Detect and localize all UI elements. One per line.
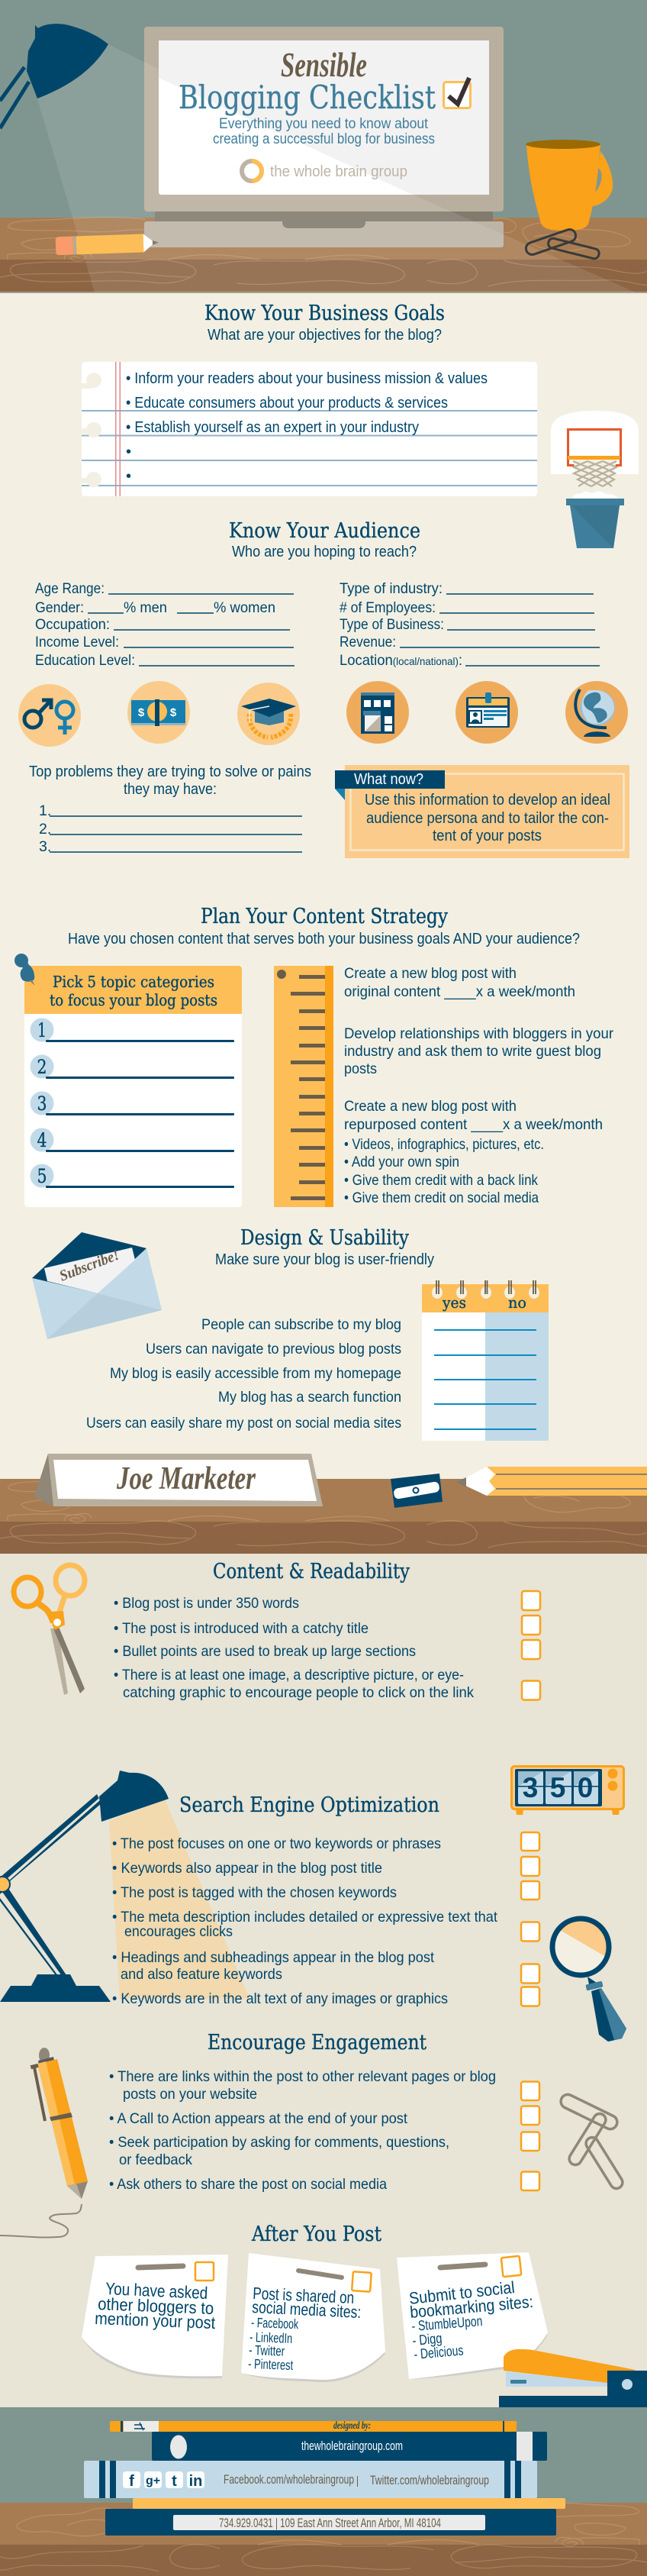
top problems list: 1. [39, 802, 51, 819]
engagement checklist: or feedback [119, 2152, 192, 2168]
SEO checklist: • The meta description includes detailed or expressive text that [112, 1909, 498, 1926]
note: bookmarking sites: Submit to social [408, 2277, 516, 2308]
book: social media: Facebook.com/wholebraingroup [224, 2472, 354, 2487]
icon: waste basket [566, 491, 624, 548]
note: social media sites: - Facebook [251, 2315, 299, 2332]
content checklist: • Bullet points are used to break up large sections [114, 1643, 416, 1660]
pencil [56, 234, 159, 255]
icon: magnifying glass [552, 1916, 626, 2042]
subtitle: Everything you need to know about [219, 116, 429, 132]
icon: title checkbox [444, 78, 470, 108]
text: guest blog posts: Develop relationships with bloggers in your [344, 1025, 613, 1042]
note: social media sites: - Pinterest [248, 2356, 294, 2373]
SEO checklist: • The post is tagged with the chosen keywords [112, 1884, 397, 1901]
note: bloggers mention [82, 2255, 228, 2378]
notebook panel: • Establish yourself as an expert in your industry [126, 419, 419, 436]
icon: globe [565, 681, 628, 744]
audience form: left column: Occupation: [35, 616, 110, 633]
panel: pick 5 topic categories: 4 [37, 1129, 47, 1151]
lamp light on SEO section [109, 1800, 249, 1999]
icon: graduation cap [237, 683, 300, 745]
SEO checklist: • Keywords also appear in the blog post title [112, 1860, 382, 1877]
panel: pick 5 topic categories [24, 966, 242, 1207]
text: repurposed content: • Give them credit with a back link [344, 1172, 538, 1189]
header desk [0, 217, 647, 293]
SEO checkboxes [521, 1832, 539, 2006]
text: original content [344, 965, 575, 1000]
content checklist: • Blog post is under 350 words [114, 1595, 299, 1612]
engagement checklist: • Ask others to share the post on social media [109, 2176, 387, 2193]
logo: the whole brain group [242, 161, 407, 181]
book: social media: t [172, 2473, 177, 2490]
book: social media: f [129, 2473, 134, 2490]
audience form: left column: % men [124, 599, 167, 616]
icon: stapler [499, 2349, 647, 2407]
engagement checklist: • A Call to Action appears at the end of your post [109, 2110, 408, 2127]
audience form: right column: # of Employees: [340, 599, 436, 616]
paperclips [524, 228, 600, 260]
heading: Design & Usability: Design & Usability [240, 1226, 410, 1250]
icon: envelope with subscribe note [32, 1232, 162, 1339]
SEO checklist: • The post focuses on one or two keywords or phrases [112, 1835, 441, 1852]
top problems text: Top problems they are trying to solve or pains [29, 763, 311, 780]
text: guest blog posts: posts [344, 1060, 377, 1077]
note: bloggers mention: mention your post [95, 2309, 216, 2332]
engagement checklist: • Seek participation by asking for comments, questions, [109, 2134, 449, 2151]
SEO checklist: and also feature keywords [121, 1966, 282, 1983]
top problems list [39, 802, 302, 855]
audience form: left column: Income Level: [35, 634, 119, 650]
panel: pick 5 topic categories: 3 [37, 1093, 47, 1115]
audience form: left column: Age Range: [35, 580, 105, 597]
note: bookmarking sites: - Digg [412, 2330, 443, 2348]
footer wall [0, 2407, 647, 2503]
usability statements: People can subscribe to my blog [201, 1316, 401, 1333]
subheading: objectives: What are your objectives for the blog? [208, 327, 442, 344]
footer desk [0, 2502, 647, 2576]
top problems text [29, 763, 311, 798]
callout: what now: What now? [354, 771, 423, 788]
engagement checkboxes [521, 2081, 539, 2190]
icon: envelope with subscribe note: Subscribe! [57, 1247, 121, 1285]
book: social media: in [189, 2473, 202, 2490]
note: bloggers mention: You have asked [105, 2279, 208, 2303]
book: social media [84, 2461, 537, 2498]
subheading: who are you hoping to reach: Who are you hoping to reach? [232, 544, 417, 560]
text: original content: original content ____x a week/month [344, 983, 575, 1000]
laptop screen [159, 40, 489, 195]
icon: scissors [14, 1565, 85, 1695]
audience form: left column: Education Level: [35, 652, 135, 669]
icon: 350 flip clock: 3 [523, 1772, 538, 1803]
text: repurposed content: • Add your own spin [344, 1154, 459, 1170]
usability statements: Users can easily share my post on social media sites [86, 1415, 401, 1432]
engagement checklist: posts on your website [123, 2086, 257, 2103]
icon: ID badge [455, 681, 518, 744]
note: bookmarking sites: bookmarking sites: [409, 2292, 534, 2322]
note: bookmarking sites [397, 2252, 548, 2379]
callout: what now [335, 765, 629, 858]
note: bookmarking sites: - Delicious [414, 2342, 464, 2362]
audience form: left column: % women [214, 599, 275, 616]
text: repurposed content: • Videos, infographics, pictures, etc. [344, 1136, 544, 1153]
book: designed by [110, 2420, 517, 2432]
subtitle [213, 116, 435, 147]
book: website: thewholebraingroup.com [301, 2439, 403, 2453]
lamp light beam [37, 44, 636, 292]
audience form: left column [35, 580, 295, 669]
yes/no notepad: yes [442, 1293, 466, 1312]
engagement checklist [109, 2068, 496, 2193]
text: original content: Create a new blog post with [344, 965, 517, 982]
icon: 350 flip clock: 0 [578, 1772, 593, 1803]
book: social media: g+ [146, 2474, 160, 2487]
panel: pick 5 topic categories: to focus your blog posts [50, 991, 217, 1009]
panel: pick 5 topic categories: Pick 5 topic categories [53, 973, 214, 991]
heading: Encourage Engagement: Encourage Engagement [208, 2031, 427, 2055]
callout: what now: tent of your posts [433, 827, 542, 844]
coffee mug [526, 140, 613, 231]
middle desk [0, 1478, 647, 1554]
panel: pick 5 topic categories: 1 [37, 1019, 47, 1041]
icon: 350 flip clock [511, 1767, 624, 1815]
content checklist: • The post is introduced with a catchy title [114, 1620, 369, 1637]
note: social media sites: Post is shared on [253, 2284, 355, 2307]
heading: Know Your Business Goals: Know Your Business Goals [204, 302, 445, 325]
text: guest blog posts [344, 1025, 613, 1077]
callout: what now: audience persona and to tailor the con- [366, 809, 609, 827]
book: designed by: designed by: [333, 2420, 371, 2432]
text: repurposed content [344, 1098, 603, 1206]
content checklist: catching graphic to encourage people to click on the link [123, 1684, 474, 1701]
audience form: left column: Gender: [35, 599, 84, 616]
title: Sensible: Sensible [281, 45, 367, 84]
note: bookmarking sites: - StumbleUpon [411, 2313, 483, 2334]
notebook panel: • Educate consumers about your products & services [126, 395, 448, 412]
heading: Know Your Audience: Know Your Audience [229, 519, 420, 543]
name plaque: Joe Marketer [116, 1461, 256, 1496]
icon: grey paperclips [558, 2092, 625, 2190]
content checkboxes [522, 1591, 540, 1700]
book: website [152, 2432, 547, 2461]
heading: Search Engine Optimization: Search Engine Optimization [179, 1793, 439, 1817]
notebook panel: • Inform your readers about your business mission & values [126, 370, 488, 387]
text: guest blog posts: industry and ask them to write guest blog [344, 1043, 601, 1060]
note: social media sites: social media sites: [252, 2297, 362, 2322]
icon: gender symbols [18, 684, 81, 747]
notebook panel: • [126, 444, 131, 460]
usability statements: My blog has a search function [218, 1389, 401, 1406]
content checklist [114, 1595, 474, 1701]
subtitle: creating a successful blog for business [213, 131, 435, 147]
callout: what now: Use this information to develop an ideal [365, 791, 610, 809]
note: bloggers mention: other bloggers to [98, 2294, 214, 2318]
book: social media: Twitter.com/wholebraingroup [370, 2473, 489, 2487]
audience form: right column: Type of Business: [340, 616, 444, 633]
note: social media sites: - LinkedIn [249, 2329, 293, 2346]
engagement checklist: • There are links within the post to other relevant pages or blog [109, 2068, 496, 2085]
icon: basketball hoop [551, 411, 639, 487]
second section background [0, 1554, 647, 2407]
yes/no notepad: no [508, 1293, 526, 1312]
desk lamp [0, 1771, 169, 2002]
icon: push pin [14, 954, 35, 986]
top problems text: they may have: [124, 780, 217, 798]
text: repurposed content: • Give them credit on social media [344, 1190, 539, 1206]
icon: money: $ [138, 706, 145, 719]
text: repurposed content: Create a new blog post with [344, 1098, 517, 1115]
note: social media sites [241, 2253, 385, 2382]
icon: money: $ [170, 706, 177, 719]
text: repurposed content: repurposed content ____x a week/month [344, 1116, 603, 1133]
panel: pick 5 topic categories: 2 [37, 1056, 47, 1078]
name plaque [34, 1454, 323, 1506]
usability statements: My blog is easily accessible from my homepage [110, 1365, 401, 1382]
note: social media sites: - Twitter [249, 2342, 285, 2359]
audience form: right column [340, 580, 600, 669]
title: Blogging Checklist: Blogging Checklist [179, 79, 436, 116]
icon: pen with squiggle [0, 2048, 88, 2238]
SEO checklist: encourages clicks [124, 1923, 233, 1940]
lamp [0, 24, 108, 128]
subheading: content: Have you chosen content that serves both your business goals AND your audience? [68, 931, 580, 947]
top problems list: 2. [39, 821, 51, 838]
icon: pencil sharpener [391, 1474, 443, 1508]
SEO checklist: • Keywords are in the alt text of any images or graphics [112, 1990, 448, 2007]
icon: 350 flip clock: 5 [550, 1772, 565, 1803]
book: contact address [105, 2509, 556, 2536]
heading: Plan Your Content Strategy: Plan Your Content Strategy [201, 905, 449, 928]
book: orange [133, 2498, 565, 2509]
audience form: right column: Type of industry: [340, 580, 443, 597]
notebook panel [82, 362, 537, 496]
header wall [0, 0, 647, 218]
notebook panel: • [126, 468, 131, 485]
icon: ruler [274, 966, 333, 1207]
audience form: right column: Revenue: [340, 634, 396, 650]
large pencil [456, 1467, 647, 1496]
logo: the whole brain group: the whole brain group [270, 163, 407, 180]
usability statements [86, 1316, 401, 1432]
heading: Content & Readability: Content & Readability [213, 1560, 410, 1583]
laptop [144, 27, 504, 247]
subheading: user friendly: Make sure your blog is user-friendly [215, 1251, 434, 1268]
content checklist: • There is at least one image, a descriptive picture, or eye- [114, 1667, 464, 1683]
yes/no notepad [422, 1280, 549, 1441]
icon: money [127, 681, 190, 744]
SEO checklist: • Headings and subheadings appear in the blog post [112, 1949, 435, 1966]
heading: After You Post: After You Post [251, 2223, 381, 2246]
audience form: right column: Location(local/national): [340, 652, 462, 669]
icon: storefront [346, 681, 409, 744]
book: contact address: 734.929.0431 | 109 East Ann Street Ann Arbor, MI 48104 [219, 2516, 441, 2530]
top problems list: 3. [39, 838, 51, 855]
SEO checklist [112, 1835, 498, 2007]
panel: pick 5 topic categories: 5 [37, 1165, 47, 1187]
usability statements: Users can navigate to previous blog posts [146, 1341, 401, 1357]
